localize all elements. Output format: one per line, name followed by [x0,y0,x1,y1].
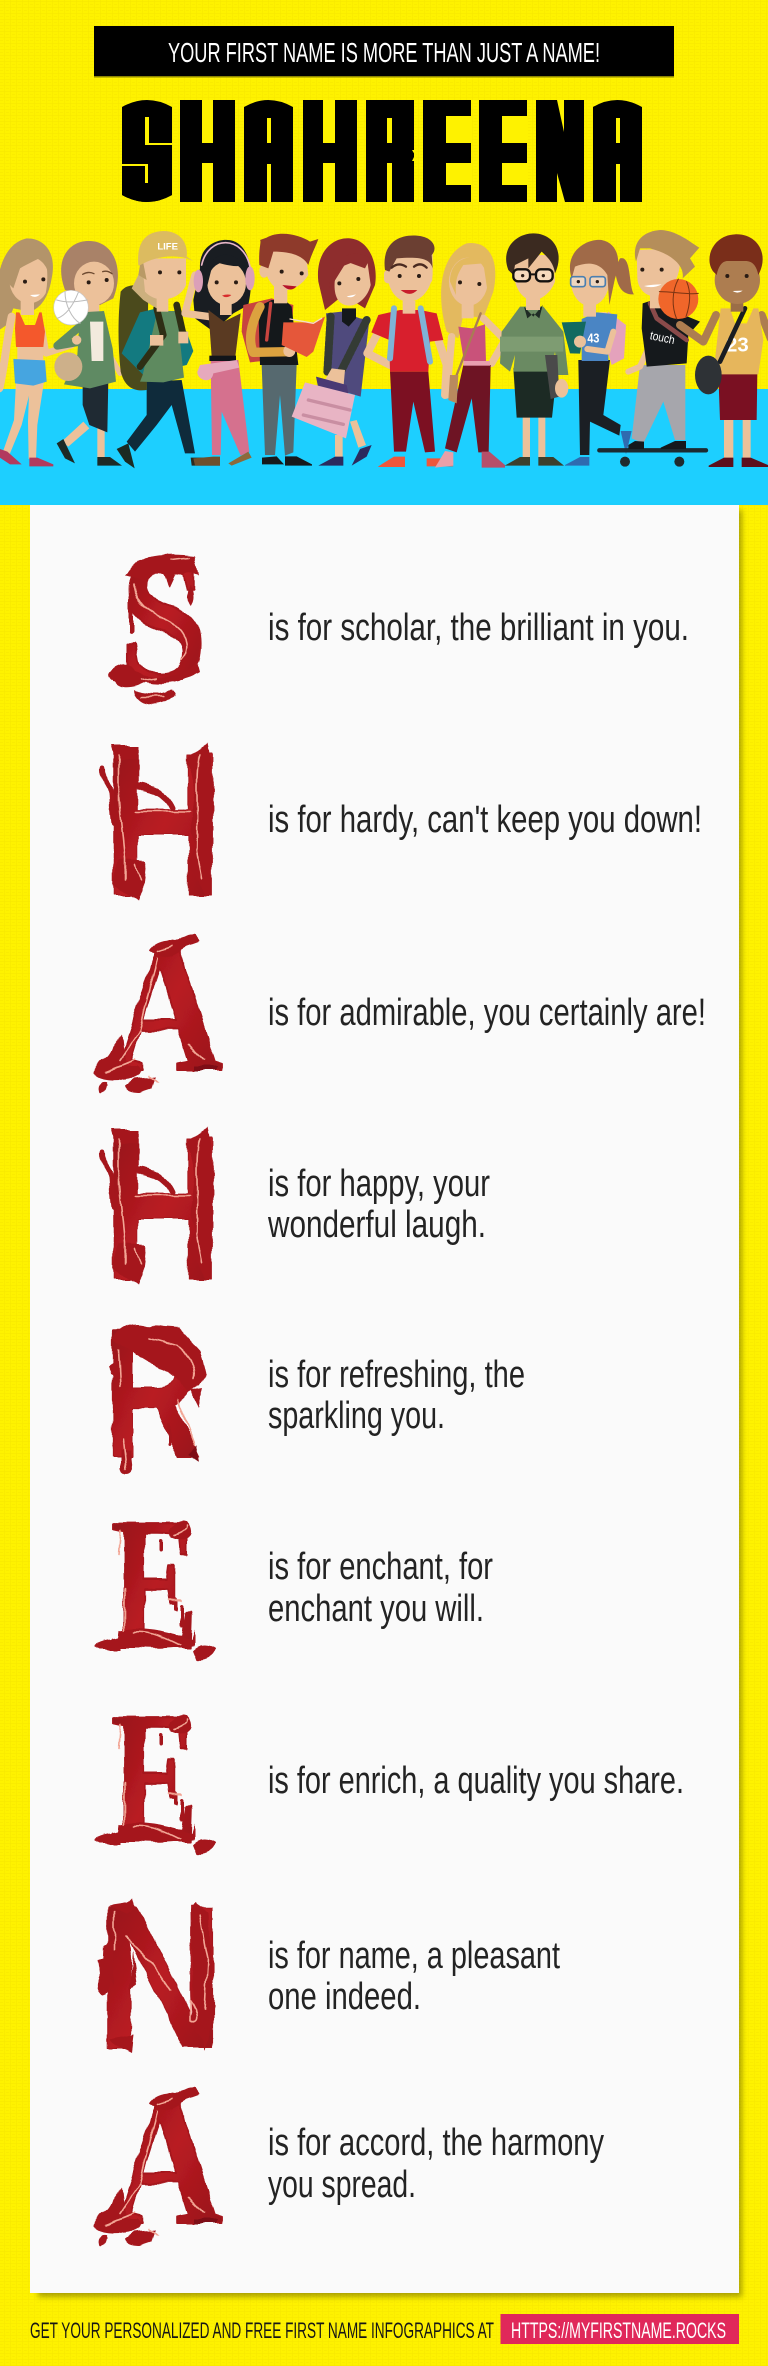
illustration: group of young people, left part [0,231,255,468]
row 6: text: enchant you will. [268,1588,484,1630]
person: boy in yellow tank top: 23 [726,335,749,357]
person: boy in red T-shirt [367,236,453,467]
row 9: letter A: A [112,2059,223,2263]
person: boy with black glasses and laptop [500,233,568,466]
person: backpacker with cap [117,231,220,468]
row 5: text [268,1354,525,1437]
row 3: letter A: A [112,906,223,1110]
illustration: group of young people, right part [500,230,768,467]
person: skateboarder spinning a basketball [599,230,706,467]
row 8: text: one indeed. [268,1976,421,2018]
blue floor band [0,389,768,505]
person: blonde girl with shoulder bag [435,243,505,468]
person: girl with volleyball [54,241,122,466]
person: girl with glasses and tablet: 43 [587,331,599,345]
row 4: text: is for happy, your [268,1163,490,1205]
row 8: letter N: N [96,1863,226,2093]
row 5: letter R: R [104,1289,203,1497]
row 8: text: is for name, a pleasant [268,1935,560,1977]
row 4: text [267,1163,490,1246]
row 4: letter H: H [102,1093,224,1323]
row 5: text: is for refreshing, the [268,1354,525,1396]
title: name: SHAHREENA [115,82,653,229]
row 4: text: wonderful laugh. [267,1204,486,1246]
row 6: text [268,1546,493,1630]
row 1: letter S: S [120,516,207,722]
person: backpacker with cap: LIFE [157,242,178,252]
person: girl with glasses and tablet [562,240,634,466]
row 6: letter E: E [111,1479,198,1689]
person: girl in orange top [0,238,72,466]
person: boy with book [242,234,325,466]
row 8: text [268,1935,560,2018]
person: girl with headphones [185,240,255,466]
row 7: letter E: E [111,1673,198,1883]
row 2: letter H: H [102,709,224,939]
tagline banner [94,26,674,78]
row 6: text: is for enchant, for [268,1546,493,1588]
white content panel [30,505,742,2297]
footer call to action: GET YOUR PERSONALIZED AND FREE FIRST NAME INFOGRAPHICS AT [30,2318,494,2343]
title: name [122,100,642,202]
row 9: text: is for accord, the harmony [268,2122,604,2164]
row 9: text [268,2122,604,2206]
person: skateboarder spinning a basketball: touch [649,328,676,347]
person: boy in yellow tank top [680,234,768,467]
illustration: group of young people, middle part [242,234,505,468]
row 5: text: sparkling you. [268,1395,445,1437]
person: red-haired girl with pink bag [292,238,376,466]
row 9: text: you spread. [268,2164,416,2206]
